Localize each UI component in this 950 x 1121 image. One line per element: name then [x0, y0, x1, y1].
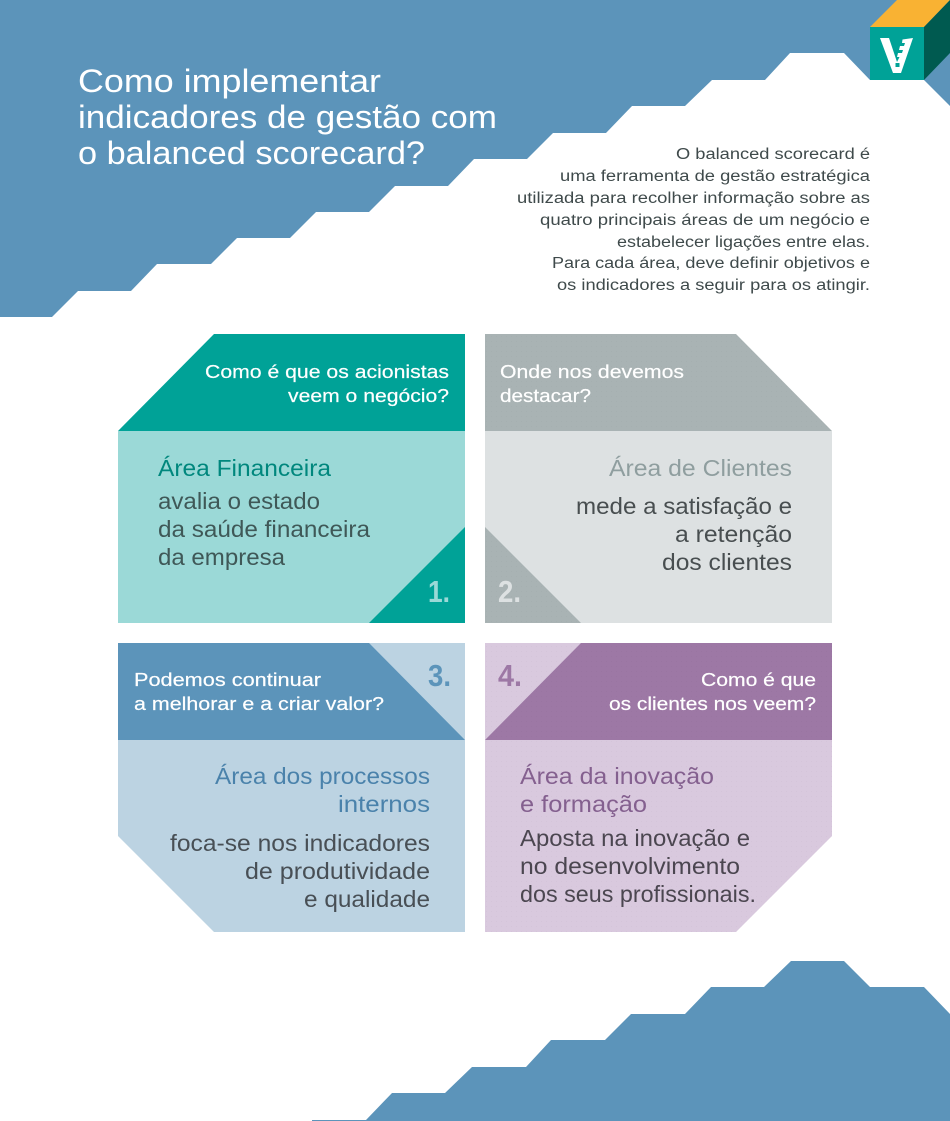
heading: area da inovacao e formacao: e formação	[520, 791, 647, 817]
question 4: os clientes nos veem?	[609, 693, 816, 714]
description 4: dos seus profissionais.	[520, 881, 756, 907]
question 4	[609, 669, 816, 714]
intro text: O balanced scorecard é	[676, 146, 870, 163]
description 3	[170, 830, 430, 912]
heading: area da inovacao e formacao: Área da inovação	[520, 763, 714, 789]
question 4: Como é que	[701, 669, 816, 690]
question 1: veem o negócio?	[288, 385, 449, 406]
description 1: avalia o estado	[158, 488, 320, 514]
description 4: Aposta na inovação e	[520, 825, 750, 851]
question 2: destacar?	[500, 385, 591, 406]
top stepped blue background	[0, 0, 950, 317]
heading: area dos processos internos: internos	[338, 791, 430, 817]
description 2: mede a satisfação e	[576, 493, 792, 519]
panel 4: inovacao e formacao	[485, 643, 832, 932]
number 3: 3.	[428, 658, 451, 693]
title: o balanced scorecard?	[78, 135, 425, 171]
number 4: 4.	[498, 658, 522, 693]
description 2: a retenção	[675, 521, 792, 547]
panel 1: financeira	[118, 334, 465, 623]
heading: area financeira: Área Financeira	[158, 455, 331, 481]
number 1: 1.	[428, 574, 450, 609]
description 2	[576, 493, 792, 575]
description 4	[520, 825, 756, 907]
title	[78, 63, 497, 171]
description 1	[158, 488, 370, 570]
question 2: Onde nos devemos	[500, 361, 684, 382]
number 2: 2.	[498, 574, 521, 609]
description 4: no desenvolvimento	[520, 853, 740, 879]
question 1: Como é que os acionistas	[205, 361, 449, 382]
question 1	[205, 361, 449, 406]
heading: area de clientes: Área de Clientes	[609, 455, 792, 481]
title: indicadores de gestão com	[78, 99, 497, 135]
intro text: estabelecer ligações entre elas.	[617, 234, 870, 251]
question 3: Podemos continuar	[134, 669, 321, 690]
question 3: a melhorar e a criar valor?	[134, 693, 384, 714]
intro text: Para cada área, deve definir objetivos e	[552, 255, 870, 272]
intro text	[517, 146, 870, 294]
panel 3: processos internos	[118, 643, 465, 932]
intro text: utilizada para recolher informação sobre as	[517, 190, 870, 207]
description 1: da empresa	[158, 544, 285, 570]
intro text: quatro principais áreas de um negócio e	[540, 212, 870, 229]
description 1: da saúde financeira	[158, 516, 370, 542]
description 3: de produtividade	[245, 858, 430, 884]
heading: area dos processos internos: Área dos processos	[215, 763, 430, 789]
bottom stepped blue background	[312, 961, 950, 1121]
intro text: uma ferramenta de gestão estratégica	[560, 168, 870, 185]
question 3	[134, 669, 384, 714]
intro text: os indicadores a seguir para os atingir.	[557, 277, 870, 294]
title: Como implementar	[78, 63, 381, 99]
description 2: dos clientes	[662, 549, 792, 575]
question 2	[500, 361, 684, 406]
heading: area da inovacao e formacao	[520, 763, 714, 817]
logo cube icon	[870, 0, 950, 80]
description 3: foca-se nos indicadores	[170, 830, 430, 856]
description 3: e qualidade	[304, 886, 430, 912]
panel 2: clientes	[485, 334, 832, 623]
heading: area dos processos internos	[215, 763, 430, 817]
